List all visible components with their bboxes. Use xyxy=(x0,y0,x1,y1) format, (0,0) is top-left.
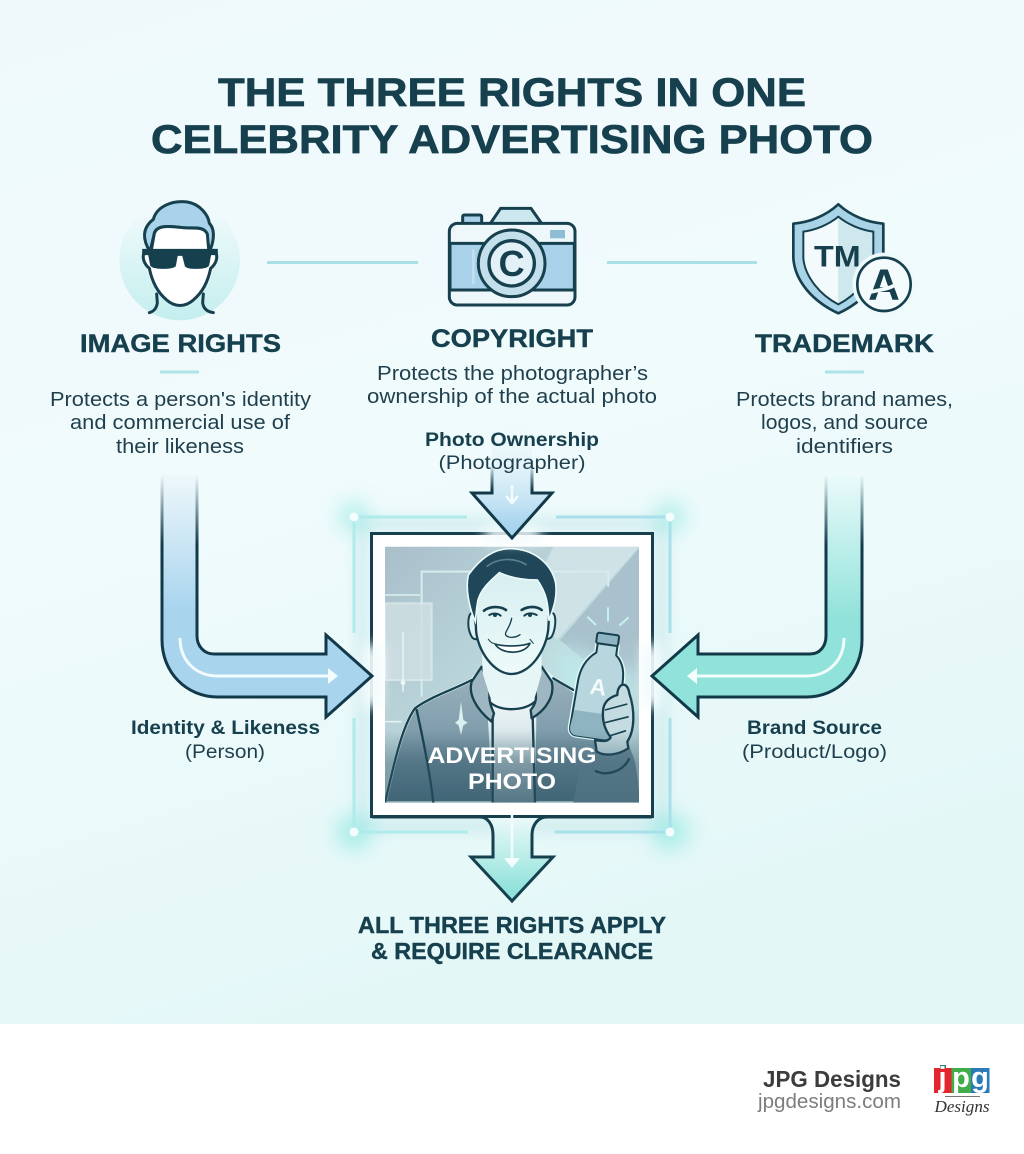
arrow: image rights to photo xyxy=(162,475,372,717)
label: brand source: Brand Source xyxy=(747,718,882,739)
text: trademark description xyxy=(736,389,953,458)
text: copyright description: Protects the photographer’s xyxy=(377,363,648,385)
text: copyright description xyxy=(367,363,657,408)
text: image rights description xyxy=(50,389,311,458)
label: advertising photo: PHOTO xyxy=(468,769,556,794)
footer logo: g xyxy=(971,1062,989,1094)
arrow: photo to conclusion xyxy=(372,815,652,901)
bottle xyxy=(569,631,629,741)
icon: camera with copyright lens xyxy=(449,208,575,305)
icon: trademark shield with brand badge: A xyxy=(868,261,900,310)
bottle: A xyxy=(588,673,608,701)
sparkle xyxy=(455,702,468,735)
glow rays xyxy=(587,607,629,626)
footer logo: Designs xyxy=(933,1097,990,1116)
arrow: copyright to photo xyxy=(472,420,552,538)
heading: image rights: IMAGE RIGHTS xyxy=(80,330,281,358)
label: identity and likeness: (Person) xyxy=(185,742,265,763)
back fingers xyxy=(574,692,575,693)
text: trademark description: logos, and source xyxy=(761,412,928,434)
label: identity and likeness xyxy=(131,718,320,763)
hand xyxy=(595,685,633,755)
conclusion text: & REQUIRE CLEARANCE xyxy=(371,938,653,964)
footer logo: j xyxy=(937,1062,947,1094)
text: trademark description: Protects brand names, xyxy=(736,389,953,411)
arrow: trademark to photo xyxy=(652,475,862,717)
label: brand source: (Product/Logo) xyxy=(742,742,887,763)
label: photo ownership: (Photographer) xyxy=(438,453,586,474)
title: CELEBRITY ADVERTISING PHOTO xyxy=(151,118,873,162)
title: THE THREE RIGHTS IN ONE xyxy=(218,71,806,115)
jacket xyxy=(385,667,640,803)
facial features xyxy=(484,607,542,643)
collar xyxy=(471,667,494,722)
footer logo xyxy=(933,1062,990,1116)
footer brand text: JPG Designs xyxy=(763,1066,901,1092)
soft glow at arrow tips xyxy=(362,526,662,707)
label: advertising photo xyxy=(428,743,596,794)
divider: image rights xyxy=(160,370,199,374)
bottom shade xyxy=(385,730,639,803)
text: copyright description: ownership of the actual photo xyxy=(367,386,657,408)
divider: trademark xyxy=(825,370,864,374)
footer logo: p xyxy=(952,1062,970,1094)
label: advertising photo: ADVERTISING xyxy=(428,743,596,768)
footer brand text xyxy=(757,1066,901,1113)
icon: camera with copyright lens: C xyxy=(499,243,525,284)
heading: trademark: TRADEMARK xyxy=(755,330,934,358)
label: photo ownership: Photo Ownership xyxy=(425,430,599,451)
connector lines between icons xyxy=(267,261,757,264)
icon: trademark shield with brand badge xyxy=(793,204,916,316)
title xyxy=(151,71,873,162)
advertising photo illustration xyxy=(385,547,640,803)
sleeve xyxy=(573,746,639,802)
conclusion text xyxy=(358,912,666,964)
text: image rights description: Protects a person's identity xyxy=(50,389,311,411)
footer brand text: jpgdesigns.com xyxy=(757,1091,901,1113)
neck and face xyxy=(482,653,542,700)
corner glows and tech lines xyxy=(336,503,688,850)
icon: person with sunglasses xyxy=(119,200,240,320)
conclusion text: ALL THREE RIGHTS APPLY xyxy=(358,912,666,938)
text: image rights description: their likeness xyxy=(116,436,244,458)
shirt xyxy=(487,697,537,803)
label: brand source xyxy=(742,718,887,763)
footer band xyxy=(0,1024,1024,1154)
label: photo ownership xyxy=(425,430,599,474)
text: image rights description: and commercial use of xyxy=(70,412,290,434)
central photo frame xyxy=(372,534,652,816)
label: identity and likeness: Identity & Likeness xyxy=(131,718,320,739)
icon: trademark shield with brand badge: TM xyxy=(814,241,861,274)
hair xyxy=(467,549,556,622)
heading: copyright: COPYRIGHT xyxy=(431,325,593,353)
text: trademark description: identifiers xyxy=(796,436,893,458)
